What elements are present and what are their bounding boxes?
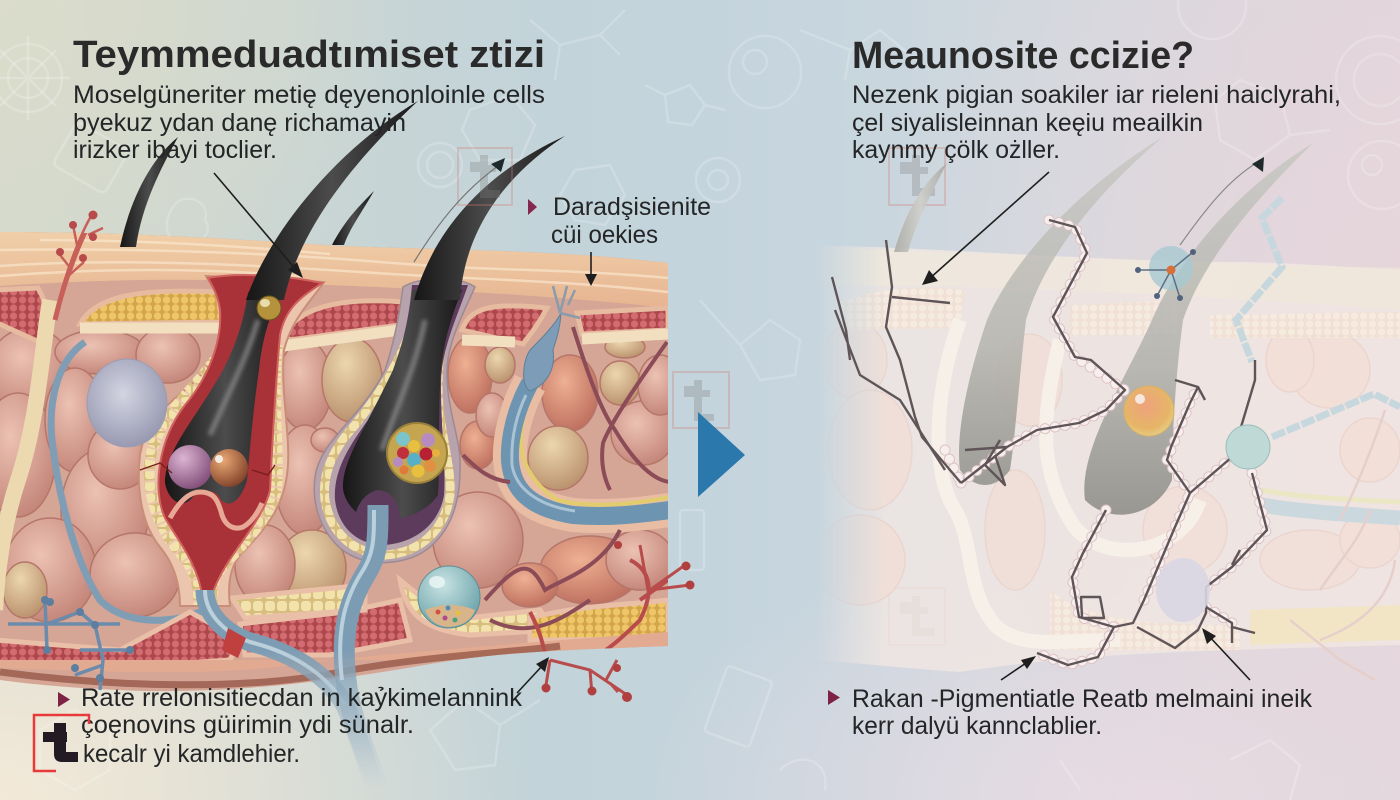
dermis base (0, 232, 668, 702)
faded blue band (1262, 505, 1400, 518)
follicle red sheath (158, 275, 322, 595)
center arrow (698, 412, 745, 497)
follicle left (139, 275, 324, 606)
body text right: Nezenk pigian soakiler iar rieleni haiclyrahi, (852, 81, 1341, 109)
lower red band (0, 580, 668, 668)
follicle dark sheath (335, 285, 468, 545)
body text left (73, 81, 545, 164)
grey hair A (894, 163, 947, 252)
vessel right yellow stripe (521, 420, 670, 505)
faded watermark logos (458, 148, 945, 645)
grey hair C (1084, 143, 1313, 515)
upper cell bands (0, 288, 668, 345)
bulb right (343, 290, 462, 518)
callout left upper right (528, 193, 711, 249)
blue dotted vessel right (1272, 394, 1400, 437)
arrow to hair tip (1180, 157, 1264, 245)
blue flask (524, 313, 561, 391)
cracks dark network (832, 220, 1267, 665)
hair D (414, 136, 565, 300)
callout bottom right: Rakan -Pigmentiatle Reatb melmaini ineik (852, 685, 1312, 713)
follicle right (314, 279, 475, 563)
red branching tree upper (55, 232, 85, 320)
faded epidermis (1356, 267, 1400, 270)
grey hairs right (894, 137, 1313, 515)
base membrane (0, 632, 668, 672)
follicle outer wall (139, 276, 324, 606)
body text right: çel siyalisleinnan keęiu meailkin (852, 109, 1203, 137)
vessel right highlight (512, 395, 575, 511)
molecule lower left (8, 596, 134, 690)
arrow to follicle (214, 173, 303, 278)
blue vessel left (51, 342, 205, 620)
right spheres (1124, 246, 1270, 622)
sphere: cell with coloured granules (387, 423, 447, 483)
callout bottom right: kerr dalyü kannclablier. (852, 712, 1102, 740)
vessel right pale wall (510, 383, 670, 516)
body text left: þyekuz ydan danę richamayin (73, 109, 406, 137)
body text right: kaynmy çölk ożller. (852, 136, 1060, 164)
logo (34, 715, 89, 771)
follicle pale band (320, 336, 455, 560)
title left: Teymmeduadtımiset ztizi (73, 34, 545, 76)
callout bottom left (58, 684, 523, 768)
grey hair B (959, 137, 1163, 485)
body text left: irizker ibayi toclier. (73, 136, 277, 164)
faded skin body (810, 245, 1400, 672)
epidermis streaks (0, 240, 668, 292)
sphere: purple melanosome (140, 445, 275, 489)
arrow to crack right (1202, 628, 1250, 680)
arrow lower right (517, 657, 549, 693)
follicle purple wall (314, 279, 475, 563)
fat cell cluster (0, 327, 682, 622)
tube highlight (205, 590, 345, 705)
arrow down (585, 252, 597, 286)
amber sphere (1124, 386, 1174, 436)
cracks blob outlines (945, 220, 1267, 665)
panel: healthy skin cross-section (0, 232, 682, 702)
blue dotted vessel upper (1236, 198, 1282, 362)
hair shafts left (120, 101, 565, 300)
red branching tree lower (528, 558, 668, 652)
arrow to damaged layer (922, 172, 1049, 285)
arrow curved up (414, 158, 505, 262)
arrow to crack left (1001, 656, 1036, 680)
bulb highlights (210, 320, 425, 450)
hair C (332, 191, 374, 245)
callout bottom left: çoęnovins güirimin ydi sünalr. (81, 711, 414, 739)
sphere: small gold (257, 296, 281, 320)
faded fat cells (815, 322, 1400, 605)
hair B (246, 101, 418, 300)
blue tube from right follicle (344, 505, 382, 800)
follicle inner loop (170, 492, 262, 528)
sphere: grey cell (87, 359, 167, 447)
tube red band (222, 628, 246, 658)
molecule cell (1135, 246, 1196, 301)
pale cell wall rows (0, 300, 668, 610)
bulb left (164, 292, 270, 504)
cracks pale blobs (945, 220, 1267, 665)
blue tube from left follicle (205, 590, 378, 800)
faded follicle walls (939, 320, 1200, 642)
callout bottom left: kecalr yi kamdlehier. (83, 740, 300, 768)
faded cell bands (840, 288, 1400, 650)
callout bottom left: Rate rrelonisitiecdan in kaỷkimelannink (81, 684, 523, 712)
title right: Meaunosite ccizie? (852, 35, 1194, 77)
callout left upper right: Daradşisienite (553, 193, 711, 221)
flask branches (553, 286, 580, 318)
vessel right blue (510, 383, 670, 516)
teal sphere (1226, 425, 1270, 469)
red branch upper left (56, 210, 103, 290)
body text left: Moselgüneriter metię dęyenonloinle cells (73, 81, 545, 109)
sphere: glass with granules (418, 566, 480, 628)
panel: damaged skin cross-section (810, 245, 1400, 680)
sphere: amber melanosome (210, 449, 248, 487)
hair A (120, 137, 178, 247)
faded vessels (1290, 410, 1395, 680)
follicle cell wall (149, 345, 277, 605)
red branch lower right (542, 541, 694, 702)
lilac sphere (1156, 558, 1210, 622)
callout left upper right: cüi oekies (551, 221, 658, 249)
purple vessels (463, 327, 670, 628)
body text right (852, 81, 1341, 164)
epidermis top layer (0, 232, 668, 308)
callout bottom right (828, 685, 1312, 740)
right tube highlight (340, 510, 374, 680)
